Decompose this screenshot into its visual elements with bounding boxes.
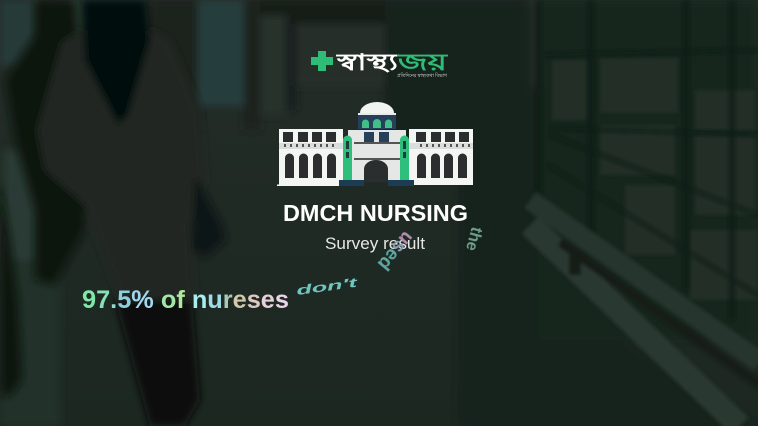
- title: DMCH NURSING: [283, 200, 468, 226]
- caption word: used, tumbling: used: [373, 227, 417, 274]
- window grille panels: [552, 58, 758, 300]
- floor left: [0, 150, 60, 426]
- green towers: [343, 136, 409, 180]
- building base: [339, 180, 414, 186]
- silhouetted people: [0, 0, 226, 426]
- logo tagline: প্রতিদিনের স্বাস্থ্যকথা বিভাগ: [397, 73, 448, 79]
- right wall and floor: [458, 90, 538, 426]
- person behind: [5, 0, 85, 285]
- balcony railing: [530, 200, 758, 426]
- dome: [360, 102, 394, 113]
- illustration: DMCH building: [277, 102, 473, 186]
- subtitle: Survey result: [325, 234, 425, 253]
- tower windows: [346, 141, 406, 158]
- headscarf: [82, 0, 150, 125]
- window grille bars: [539, 0, 758, 320]
- left corridor wall: [150, 0, 200, 130]
- legs: [115, 300, 200, 426]
- caption main words: 97.5% of nureses: [82, 286, 289, 314]
- caption word: don't: don′t: [295, 275, 359, 298]
- left wing: [279, 129, 343, 185]
- right wing: [409, 129, 473, 185]
- person at far left: [0, 180, 22, 396]
- dome drum: [358, 113, 396, 129]
- logo: Shasthyojoy: [311, 43, 449, 79]
- logo wordmark: স্বাস্থ্য জয়: [336, 43, 449, 77]
- corridor ceiling and back wall: [240, 0, 530, 24]
- caption word: the, tumbling: the: [462, 225, 486, 253]
- handbag: [192, 175, 226, 258]
- animated caption: 97.5% of nurses don't used the: [82, 225, 486, 314]
- icon: green plus: [311, 51, 333, 71]
- centre block: [348, 130, 406, 182]
- person in long coat: [37, 30, 205, 300]
